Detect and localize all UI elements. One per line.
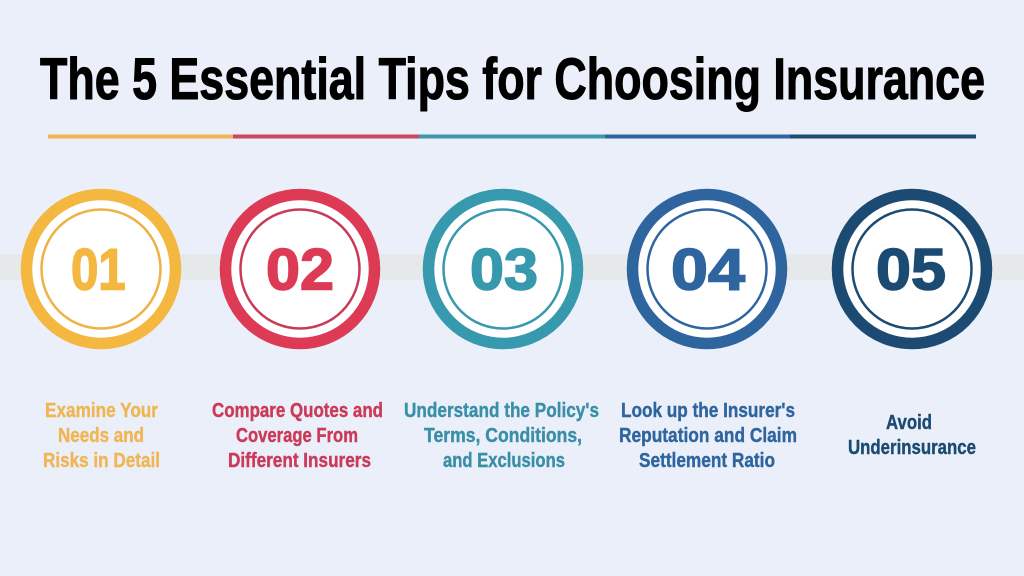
step 03 circle [428, 194, 578, 344]
step 04 label: Settlement Ratio [639, 450, 775, 472]
step 01 circle [26, 194, 176, 344]
step 05 label [848, 412, 976, 459]
step 04 circle: 04 [671, 238, 745, 302]
step 02 label [212, 400, 383, 472]
step 02 circle: 02 [266, 238, 334, 302]
step 03 circle: 03 [470, 238, 538, 302]
step 04 label: Look up the Insurer's [621, 400, 795, 422]
step 02 label: Coverage From [236, 425, 358, 447]
step 03 label: Terms, Conditions, [424, 425, 582, 447]
step 04 label: Reputation and Claim [619, 425, 797, 447]
step 02 label: Compare Quotes and [212, 400, 383, 422]
step 04 circle [632, 194, 782, 344]
step 02 circle [226, 194, 374, 344]
step 05 circle: 05 [876, 238, 946, 302]
step 05 circle [838, 194, 986, 344]
step 02 label: Different Insurers [228, 450, 371, 472]
connecting band [0, 254, 1024, 280]
step 03 label [404, 400, 599, 472]
step 03 label: and Exclusions [443, 450, 565, 472]
step 03 label: Understand the Policy's [404, 400, 599, 422]
step 01 label: Needs and [58, 425, 144, 447]
step 01 circle: 01 [71, 238, 126, 302]
title underline [48, 134, 976, 138]
step 01 label [43, 400, 160, 472]
step 01 label: Risks in Detail [43, 450, 160, 472]
step 04 label [619, 400, 797, 472]
step 05 label: Avoid [886, 412, 932, 434]
step 05 label: Underinsurance [848, 437, 976, 459]
step 01 label: Examine Your [45, 400, 158, 422]
